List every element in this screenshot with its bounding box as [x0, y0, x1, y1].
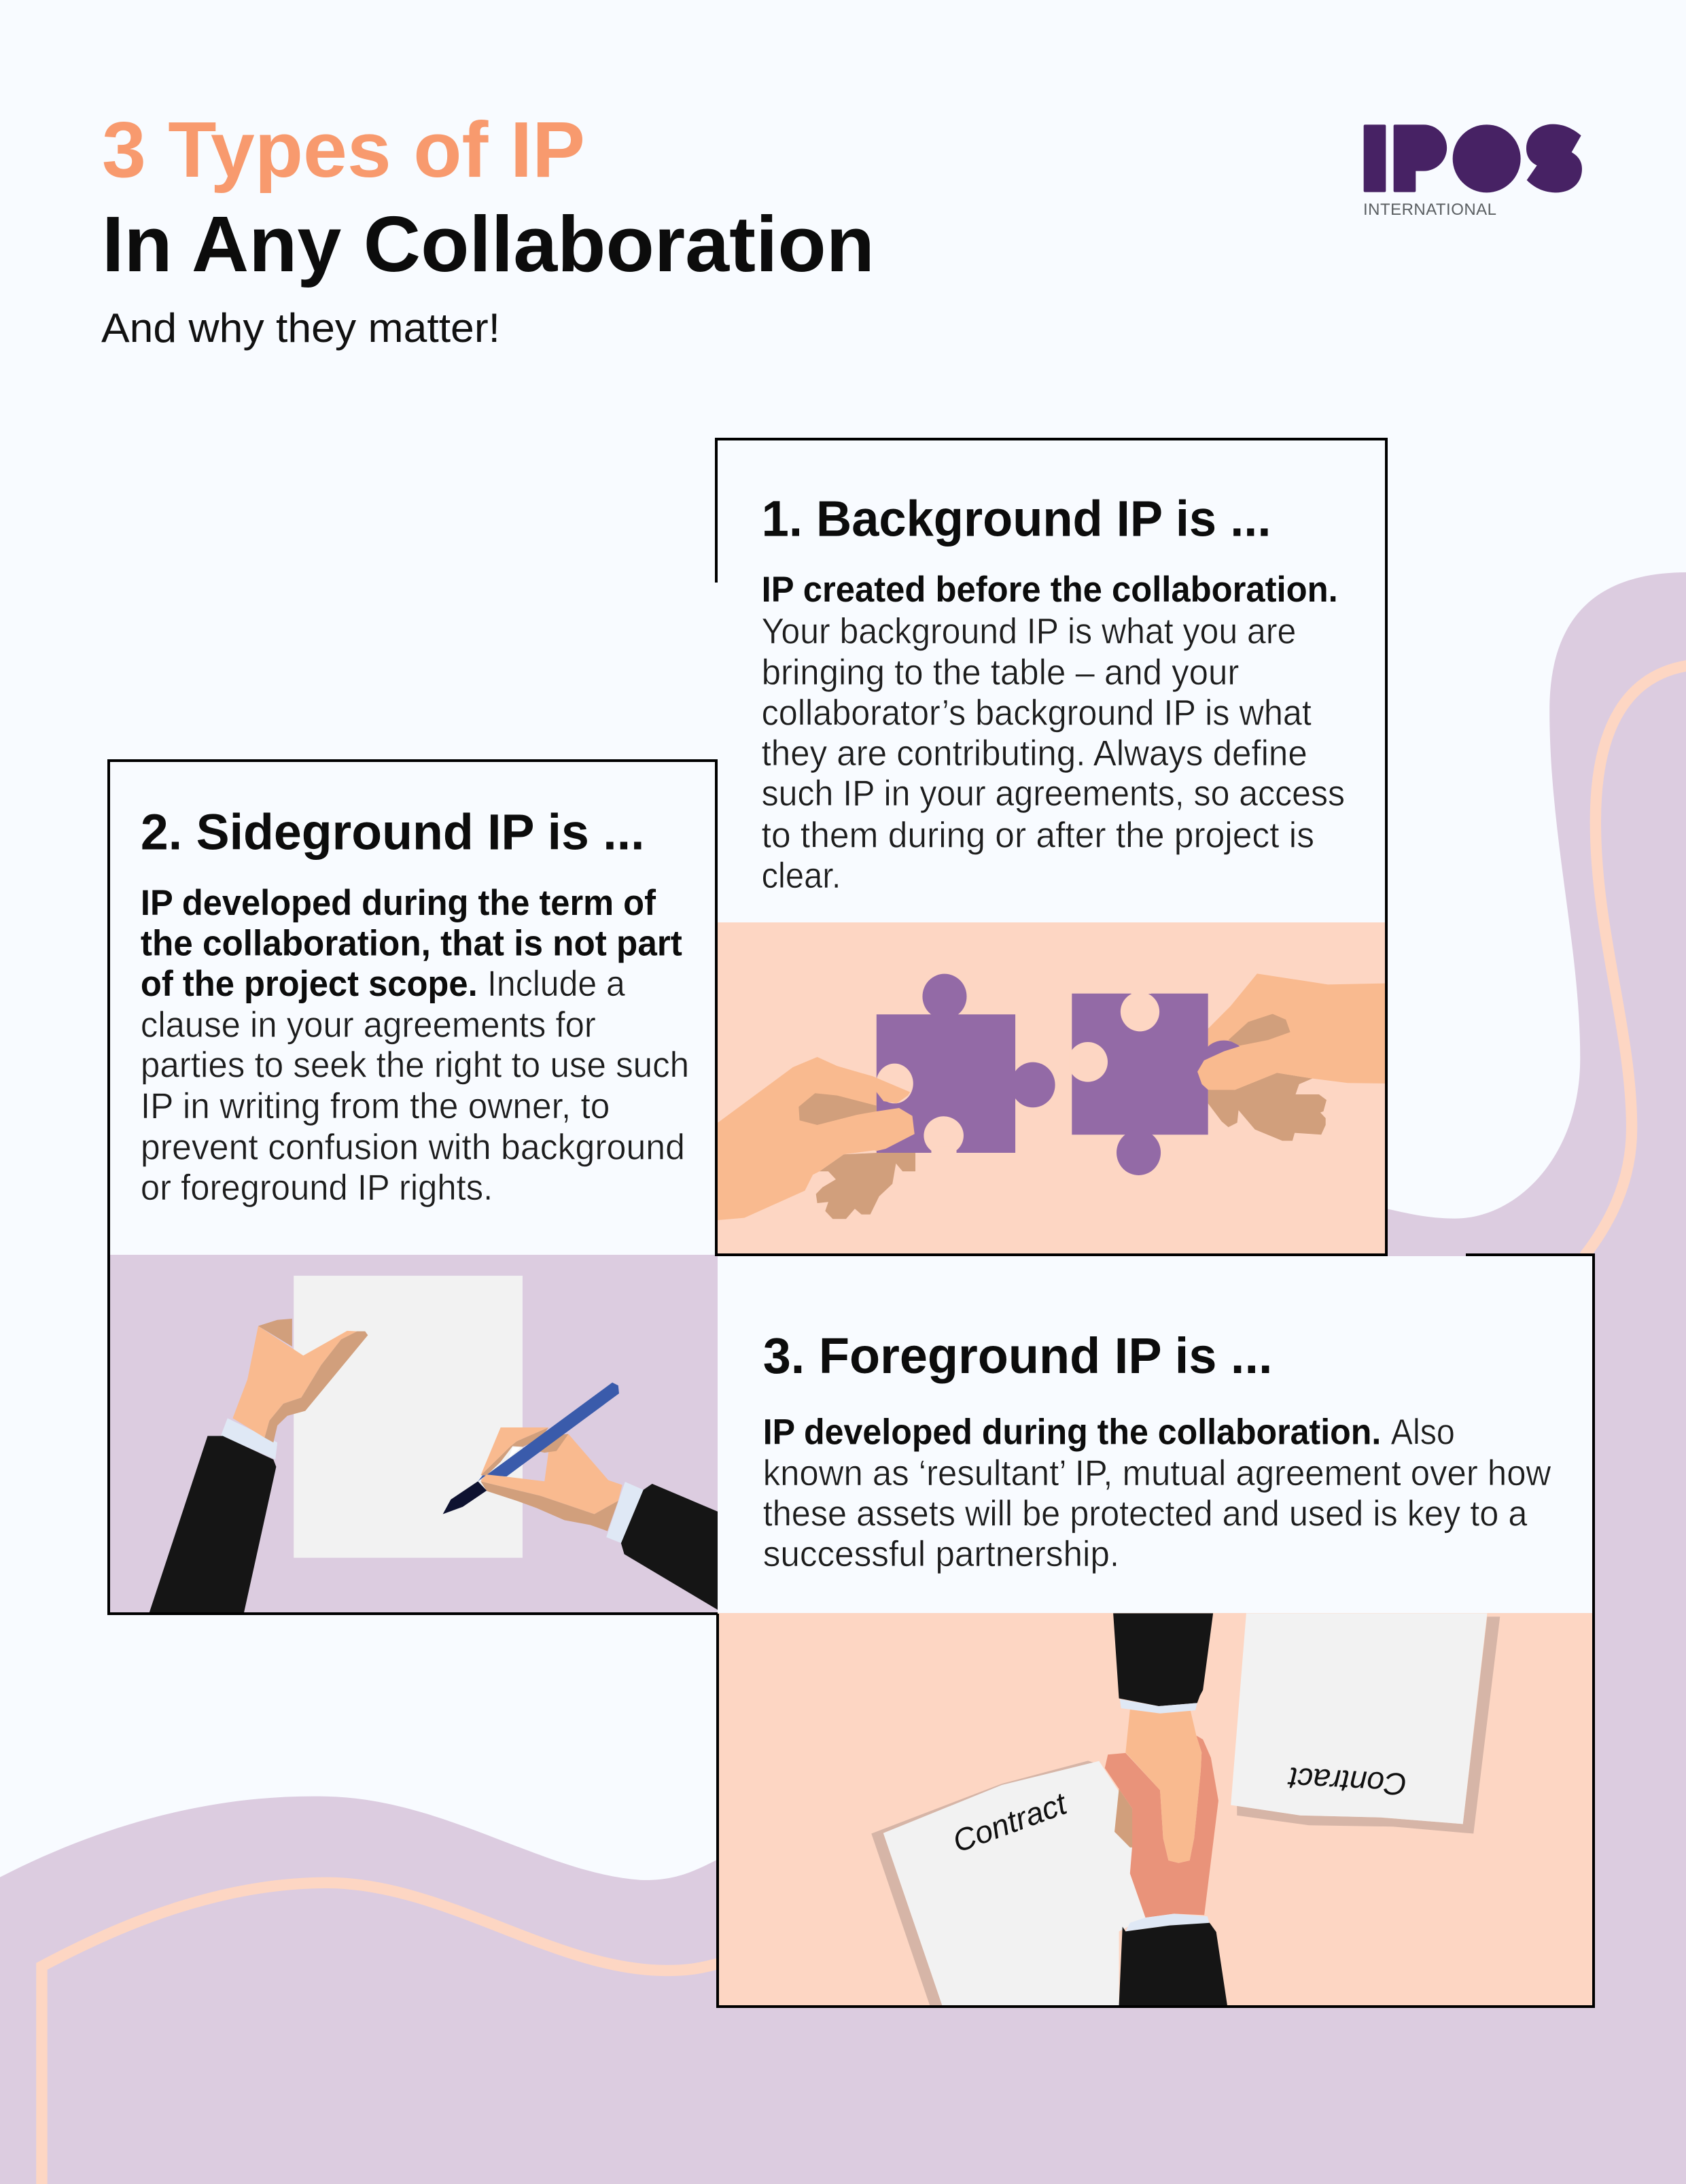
illustration: hands signing a document	[109, 1255, 718, 1615]
panel: 3. Foreground IP	[718, 1255, 1594, 2007]
text block: Foreground IP description: known as ‘resultant’ IP, mutual agreement over how	[763, 1454, 1551, 1493]
text block: Sideground IP description: IP developed during the term of	[141, 884, 656, 923]
text block: Sideground IP description: prevent confusion with background	[141, 1128, 685, 1168]
heading: Sideground IP: 2. Sideground IP is ...	[141, 804, 645, 861]
text block: Foreground IP description	[763, 1413, 1551, 1574]
panel border	[716, 439, 1386, 1255]
illustration: hands joining puzzle pieces	[718, 922, 1386, 1255]
text block: Background IP description: IP created before the collaboration.	[762, 570, 1338, 610]
subtitle: And why they matter!	[101, 305, 500, 351]
text block: Background IP description: collaborator’s background IP is what	[762, 693, 1312, 733]
text block: Sideground IP description: the collaboration, that is not part	[141, 924, 682, 963]
text block: Sideground IP description: of the project scope.	[141, 965, 478, 1004]
illustration: handshake with contracts	[718, 1613, 1594, 2007]
logo: IPOS International: INTERNATIONAL	[1363, 201, 1496, 219]
title: In Any Collaboration: In Any Collaboration	[102, 200, 875, 288]
text block: Background IP description: such IP in your agreements, so access	[762, 774, 1345, 814]
text block: Foreground IP description: these assets will be protected and used is key to a	[763, 1494, 1528, 1533]
label: Contract (left document): Contract	[948, 1785, 1072, 1859]
heading: Background IP: 1. Background IP is ...	[762, 491, 1271, 547]
text block: Background IP description	[762, 570, 1345, 896]
background decorative waves	[0, 572, 1686, 2184]
text block: Sideground IP description: Include a	[487, 965, 626, 1004]
text block: Background IP description: to them during or after the project is	[762, 816, 1314, 856]
text block: Sideground IP description	[141, 884, 689, 1208]
logo: IPOS International	[1363, 124, 1582, 219]
text block: Foreground IP description: IP developed during the collaboration.	[763, 1413, 1381, 1453]
panel border	[718, 1255, 1594, 2007]
text block: Background IP description: they are contributing. Always define	[762, 734, 1307, 774]
label: Contract (right document, upside down): Contract	[1286, 1761, 1407, 1802]
text block: Foreground IP description: successful partnership.	[763, 1535, 1119, 1574]
text block: Background IP description: bringing to the table – and your	[762, 653, 1239, 693]
panel border	[109, 761, 718, 1614]
text block: Foreground IP description: Also	[1391, 1413, 1455, 1453]
panel: 2. Sideground IP	[109, 761, 718, 1615]
heading: Foreground IP: 3. Foreground IP is ...	[763, 1328, 1273, 1384]
text block: Sideground IP description: or foreground IP rights.	[141, 1168, 493, 1208]
text block: Sideground IP description: clause in your agreements for	[141, 1005, 596, 1045]
text block: Background IP description: clear.	[762, 856, 841, 896]
text block: Sideground IP description: IP in writing from the owner, to	[141, 1087, 610, 1126]
title: 3 Types of IP: 3 Types of IP	[102, 105, 585, 194]
text block: Background IP description: Your background IP is what you are	[762, 612, 1296, 651]
panel: 1. Background IP	[716, 438, 1386, 1255]
text block: Sideground IP description: parties to seek the right to use such	[141, 1046, 689, 1086]
